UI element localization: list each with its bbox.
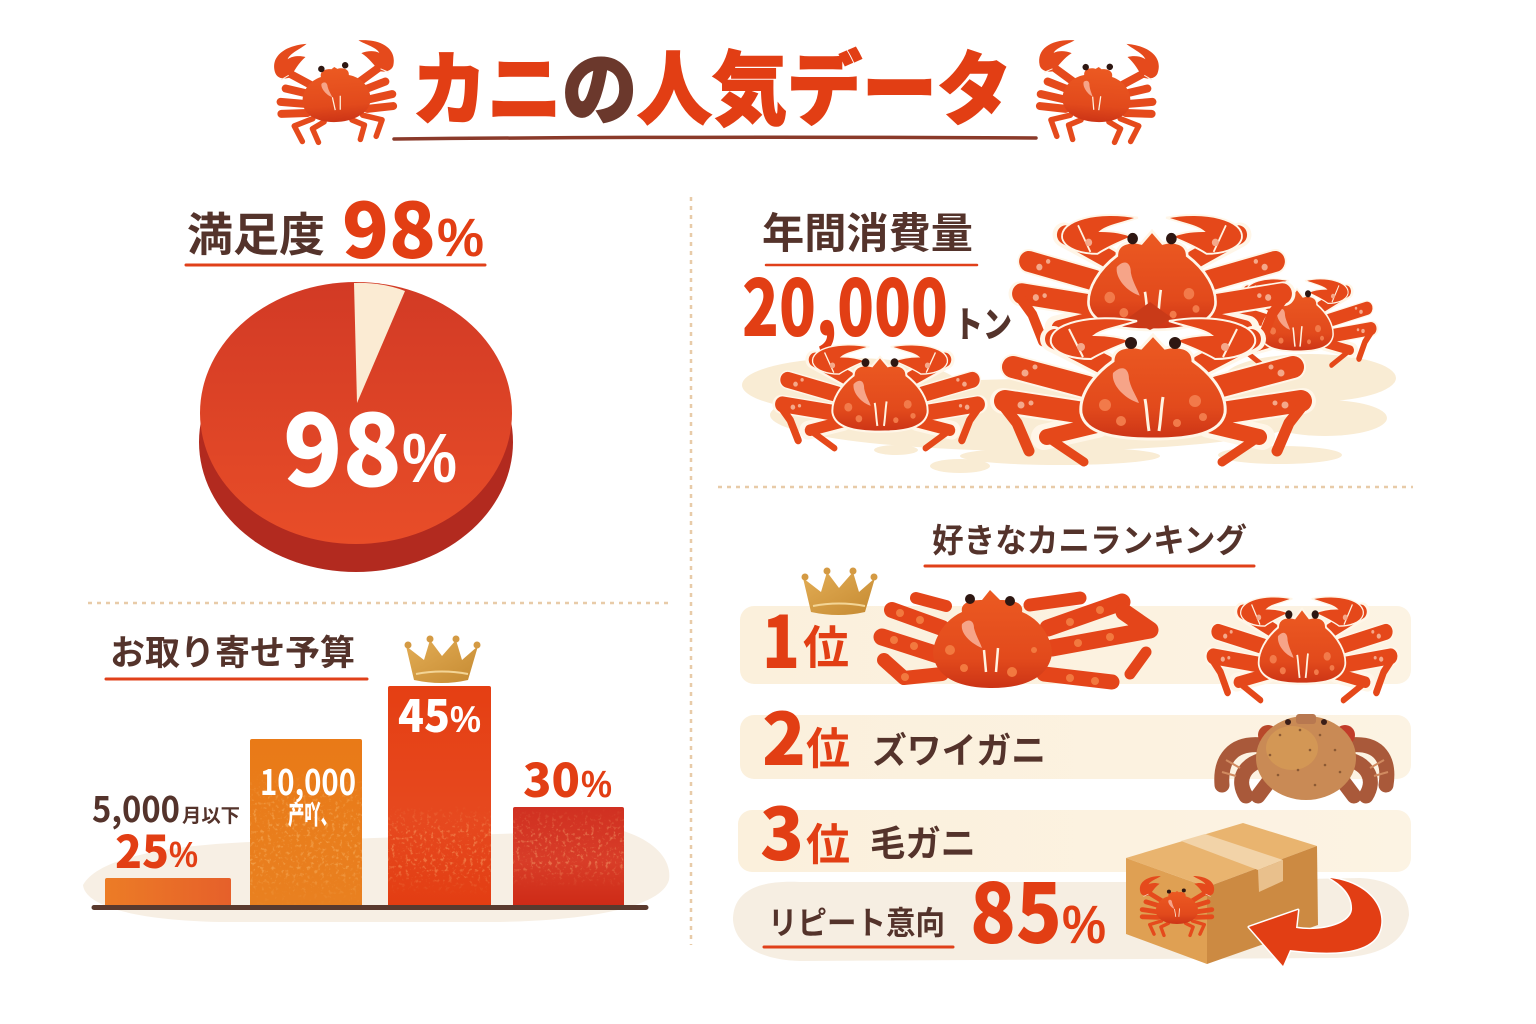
icon: crown rank 1: [802, 568, 878, 615]
rank 3 row: [738, 776, 1411, 881]
heading: satisfaction: %: [437, 208, 484, 268]
heading: satisfaction: [186, 170, 485, 280]
rank 1 row: [740, 568, 1411, 700]
icon: title crab left: [273, 38, 399, 145]
rank 1 row: 1: [762, 584, 800, 689]
crab: rank 1 second: [1212, 597, 1392, 700]
rank 2 row: 位: [806, 713, 850, 777]
rank 2 row: 2: [762, 681, 806, 786]
heading: satisfaction: 98: [342, 170, 436, 280]
rank 3 row: 毛ガニ: [870, 815, 976, 867]
bar: 5,000: [92, 782, 240, 907]
heading: ranking: 好きなカニランキング: [932, 514, 1247, 562]
panel: annual consumption: [742, 200, 1396, 473]
pie chart 98%: 98: [283, 373, 402, 515]
stat: 20,000 tons: トン: [954, 296, 1012, 348]
bar: 30%: [513, 762, 624, 905]
repeat intent row: [733, 848, 1409, 967]
rank 3 row: 位: [806, 809, 850, 873]
rank 2 row: ズワイガニ: [872, 722, 1046, 774]
crab: top: [1020, 215, 1284, 352]
pie chart 98%: %: [402, 419, 457, 497]
icon: title crab right: [1034, 38, 1160, 145]
bar: 10,000: [250, 739, 362, 907]
sand background: [742, 354, 1396, 473]
bar: 45%: 45: [398, 681, 450, 745]
crab: back right: [1222, 279, 1372, 365]
title: [273, 26, 1160, 145]
rank 3 row: 3: [760, 776, 804, 881]
heading: satisfaction: 満足度: [187, 199, 325, 265]
arrow: repeat: [1249, 878, 1381, 966]
icon: cardboard box: [1126, 823, 1318, 964]
title underline: [394, 137, 1036, 139]
crab: rank 1 king crab: [882, 590, 1150, 688]
repeat intent row: %: [1062, 895, 1106, 955]
panel: budget: [83, 625, 669, 922]
bar: 5,000: 25: [115, 816, 169, 881]
bar: 30%: 30: [523, 745, 580, 811]
crab logo on box: [1140, 876, 1214, 935]
panel: favorite crab ranking: [733, 514, 1411, 967]
heading: annual consumption: 年間消費量: [762, 200, 973, 261]
icon: crown on top bar: [404, 636, 480, 683]
bar: 30%: %: [581, 764, 612, 806]
repeat intent row: リピート意向: [768, 898, 945, 944]
bar: 5,000: 月以下: [182, 801, 240, 828]
stat: 20,000 tons: 20,000: [742, 247, 948, 359]
repeat intent row: 85: [970, 848, 1062, 967]
bar: 45%: [388, 681, 491, 907]
crab: brown hairy crab: [1222, 714, 1388, 800]
rank 1 row: 位: [803, 612, 849, 678]
panel: satisfaction: [186, 170, 513, 572]
bar: 5,000: 5,000: [92, 782, 180, 833]
bar: 45%: %: [450, 699, 481, 740]
rank 2 row: [740, 710, 1411, 804]
title text: カニの人気データ: [412, 26, 1012, 142]
pie chart 98%: [199, 282, 513, 572]
bar: 10,000: 产吖、: [288, 795, 337, 832]
heading: budget: お取り寄せ予算: [110, 625, 355, 676]
crab: left: [781, 345, 979, 448]
illustration: crab pile: [781, 215, 1372, 462]
bar: 10,000: 10,000: [260, 755, 356, 806]
crab: front: [1003, 318, 1303, 462]
bar: 5,000: %: [169, 834, 198, 875]
